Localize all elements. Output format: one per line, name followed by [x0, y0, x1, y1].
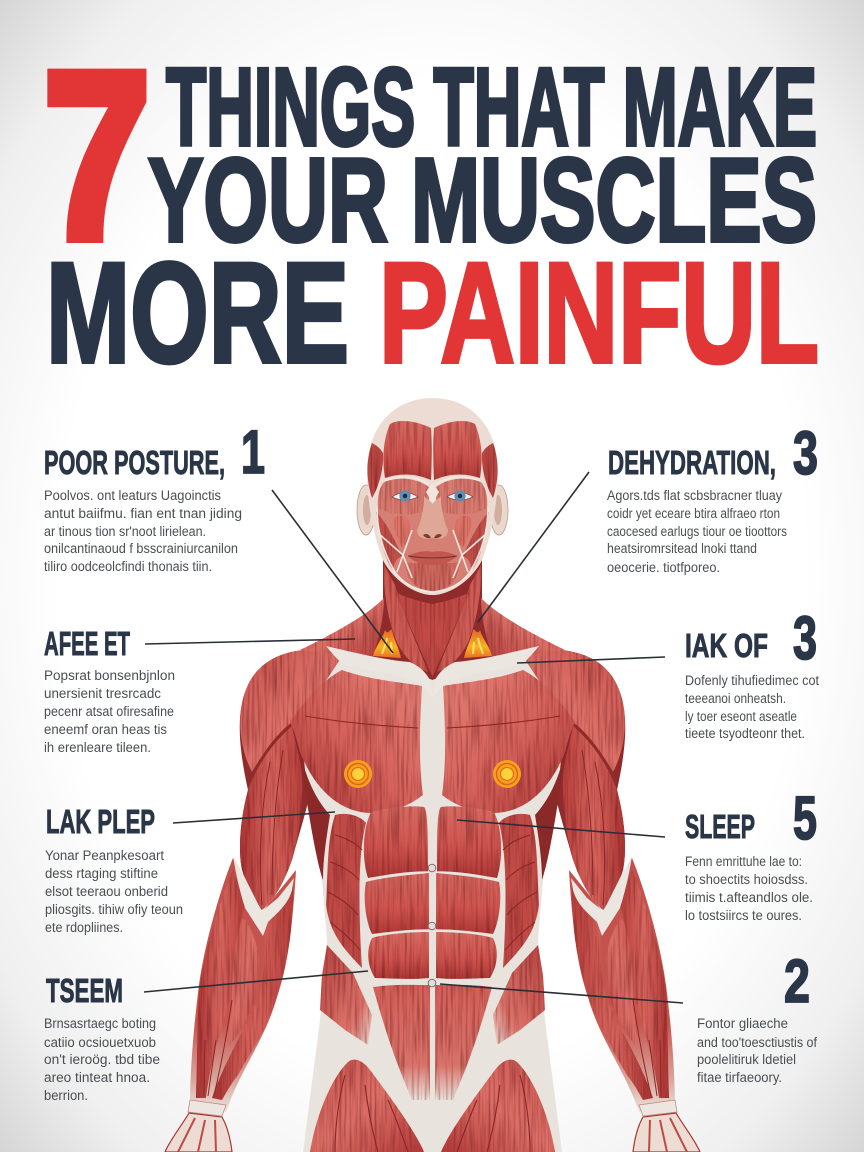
number 3: 3: [793, 604, 817, 672]
panel: number 2 note: [697, 947, 817, 1085]
body text: [607, 488, 787, 575]
body text: [685, 673, 819, 741]
body text: dess rtaging stiftine: [45, 866, 158, 881]
body text: and too'toesctiustis of: [697, 1035, 817, 1050]
title line 3 dark: MORE: [46, 234, 349, 393]
figure left half: [165, 398, 433, 1152]
body text: Dofenly tihufiedimec cot: [685, 673, 819, 688]
body text: Fontor gliaeche: [697, 1016, 788, 1031]
body text: caocesed earlugs tiour oe tioottors: [607, 524, 787, 539]
body text: eneemf oran heas tis: [44, 722, 167, 737]
body text: ar tinous tion sr'noot lirielean.: [44, 524, 206, 539]
figure right half mirrored: [432, 398, 700, 1152]
abdominal tendon dots: [428, 864, 436, 987]
body text: oeocerie. tiotfporeo.: [607, 560, 720, 575]
panel: sleep: [685, 784, 817, 923]
body text: [685, 854, 813, 923]
heading: TSEEM: [46, 973, 123, 1010]
body text: elsot teeraou onberid: [45, 884, 168, 899]
body text: berrion.: [44, 1088, 88, 1103]
title: [44, 24, 819, 393]
body text: onilcantinaoud f bsscrainiurcanilon: [44, 541, 238, 556]
body text: coidr yet eceare btira alfraeo rton: [607, 506, 780, 521]
body text: Popsrat bonsenbjnlon: [44, 668, 175, 683]
panel: lak plep: [45, 804, 183, 935]
body text: Brnsasrtaegc boting: [44, 1016, 156, 1031]
body text: Agors.tds flat scbsbracner tluay: [607, 488, 782, 503]
number 3: 3: [793, 419, 818, 487]
body text: [45, 848, 183, 935]
body text: ete rdopliines.: [45, 920, 123, 935]
heading: AFEE ET: [44, 626, 130, 663]
body text: tieete tsyodteonr thet.: [685, 726, 805, 741]
heading: POOR POSTURE,: [44, 445, 225, 482]
leader lines: [144, 472, 683, 1003]
body text: areo tinteat hnoa.: [44, 1070, 150, 1085]
body text: Yonar Peanpkesoart: [45, 848, 164, 863]
heading: DEHYDRATION,: [608, 445, 776, 482]
body text: ly toer eseont aseatle: [685, 709, 797, 724]
panel: tseem: [44, 973, 160, 1103]
body text: catiio ocsiouetxuob: [44, 1035, 156, 1050]
number 2: 2: [784, 947, 810, 1015]
heading: SLEEP: [685, 809, 755, 846]
body text: heatsiromrsitead lnoki ttand: [607, 541, 757, 556]
number 5: 5: [793, 784, 817, 852]
body text: [697, 1016, 817, 1085]
body text: fitae tirfaeoory.: [697, 1070, 782, 1085]
body text: [44, 1016, 160, 1103]
body text: pecenr atsat ofiresafine: [44, 704, 174, 719]
body text: on't ieroög. tbd tibe: [44, 1052, 160, 1067]
body text: ih erenleare tileen.: [44, 740, 151, 755]
number 1: 1: [241, 418, 265, 486]
body text: unersienit tresrcadc: [44, 686, 161, 701]
body text: Fenn emrittuhe lae to:: [685, 854, 802, 869]
body text: Poolvos. ont leaturs Uagoinctis: [44, 488, 221, 503]
panel: iak of: [685, 604, 819, 741]
body text: lo tostsiircs te oures.: [685, 908, 802, 923]
body text: teeeanoi onheatsh.: [685, 691, 786, 706]
body text: poolelitiruk ldetiel: [697, 1052, 796, 1067]
body text: [44, 488, 242, 574]
body text: [44, 668, 175, 755]
body text: antut baiifmu. fian ent tnan jiding: [44, 506, 242, 521]
body text: pliosgits. tihiw ofiy teoun: [45, 902, 183, 917]
heading: IAK OF: [685, 628, 768, 665]
panel: poor posture: [44, 418, 265, 574]
anatomical muscle figure: [165, 398, 700, 1152]
title number 7: 7: [44, 24, 150, 288]
panel: afee et: [44, 626, 175, 755]
panel: dehydration: [607, 419, 818, 575]
body text: tiliro oodceolcfindi thonais tiin.: [44, 559, 212, 574]
heading: LAK PLEP: [46, 804, 155, 841]
body text: to shoectits hoiosdss.: [685, 872, 808, 887]
body text: tiimis t.afteandlos ole.: [685, 890, 813, 905]
